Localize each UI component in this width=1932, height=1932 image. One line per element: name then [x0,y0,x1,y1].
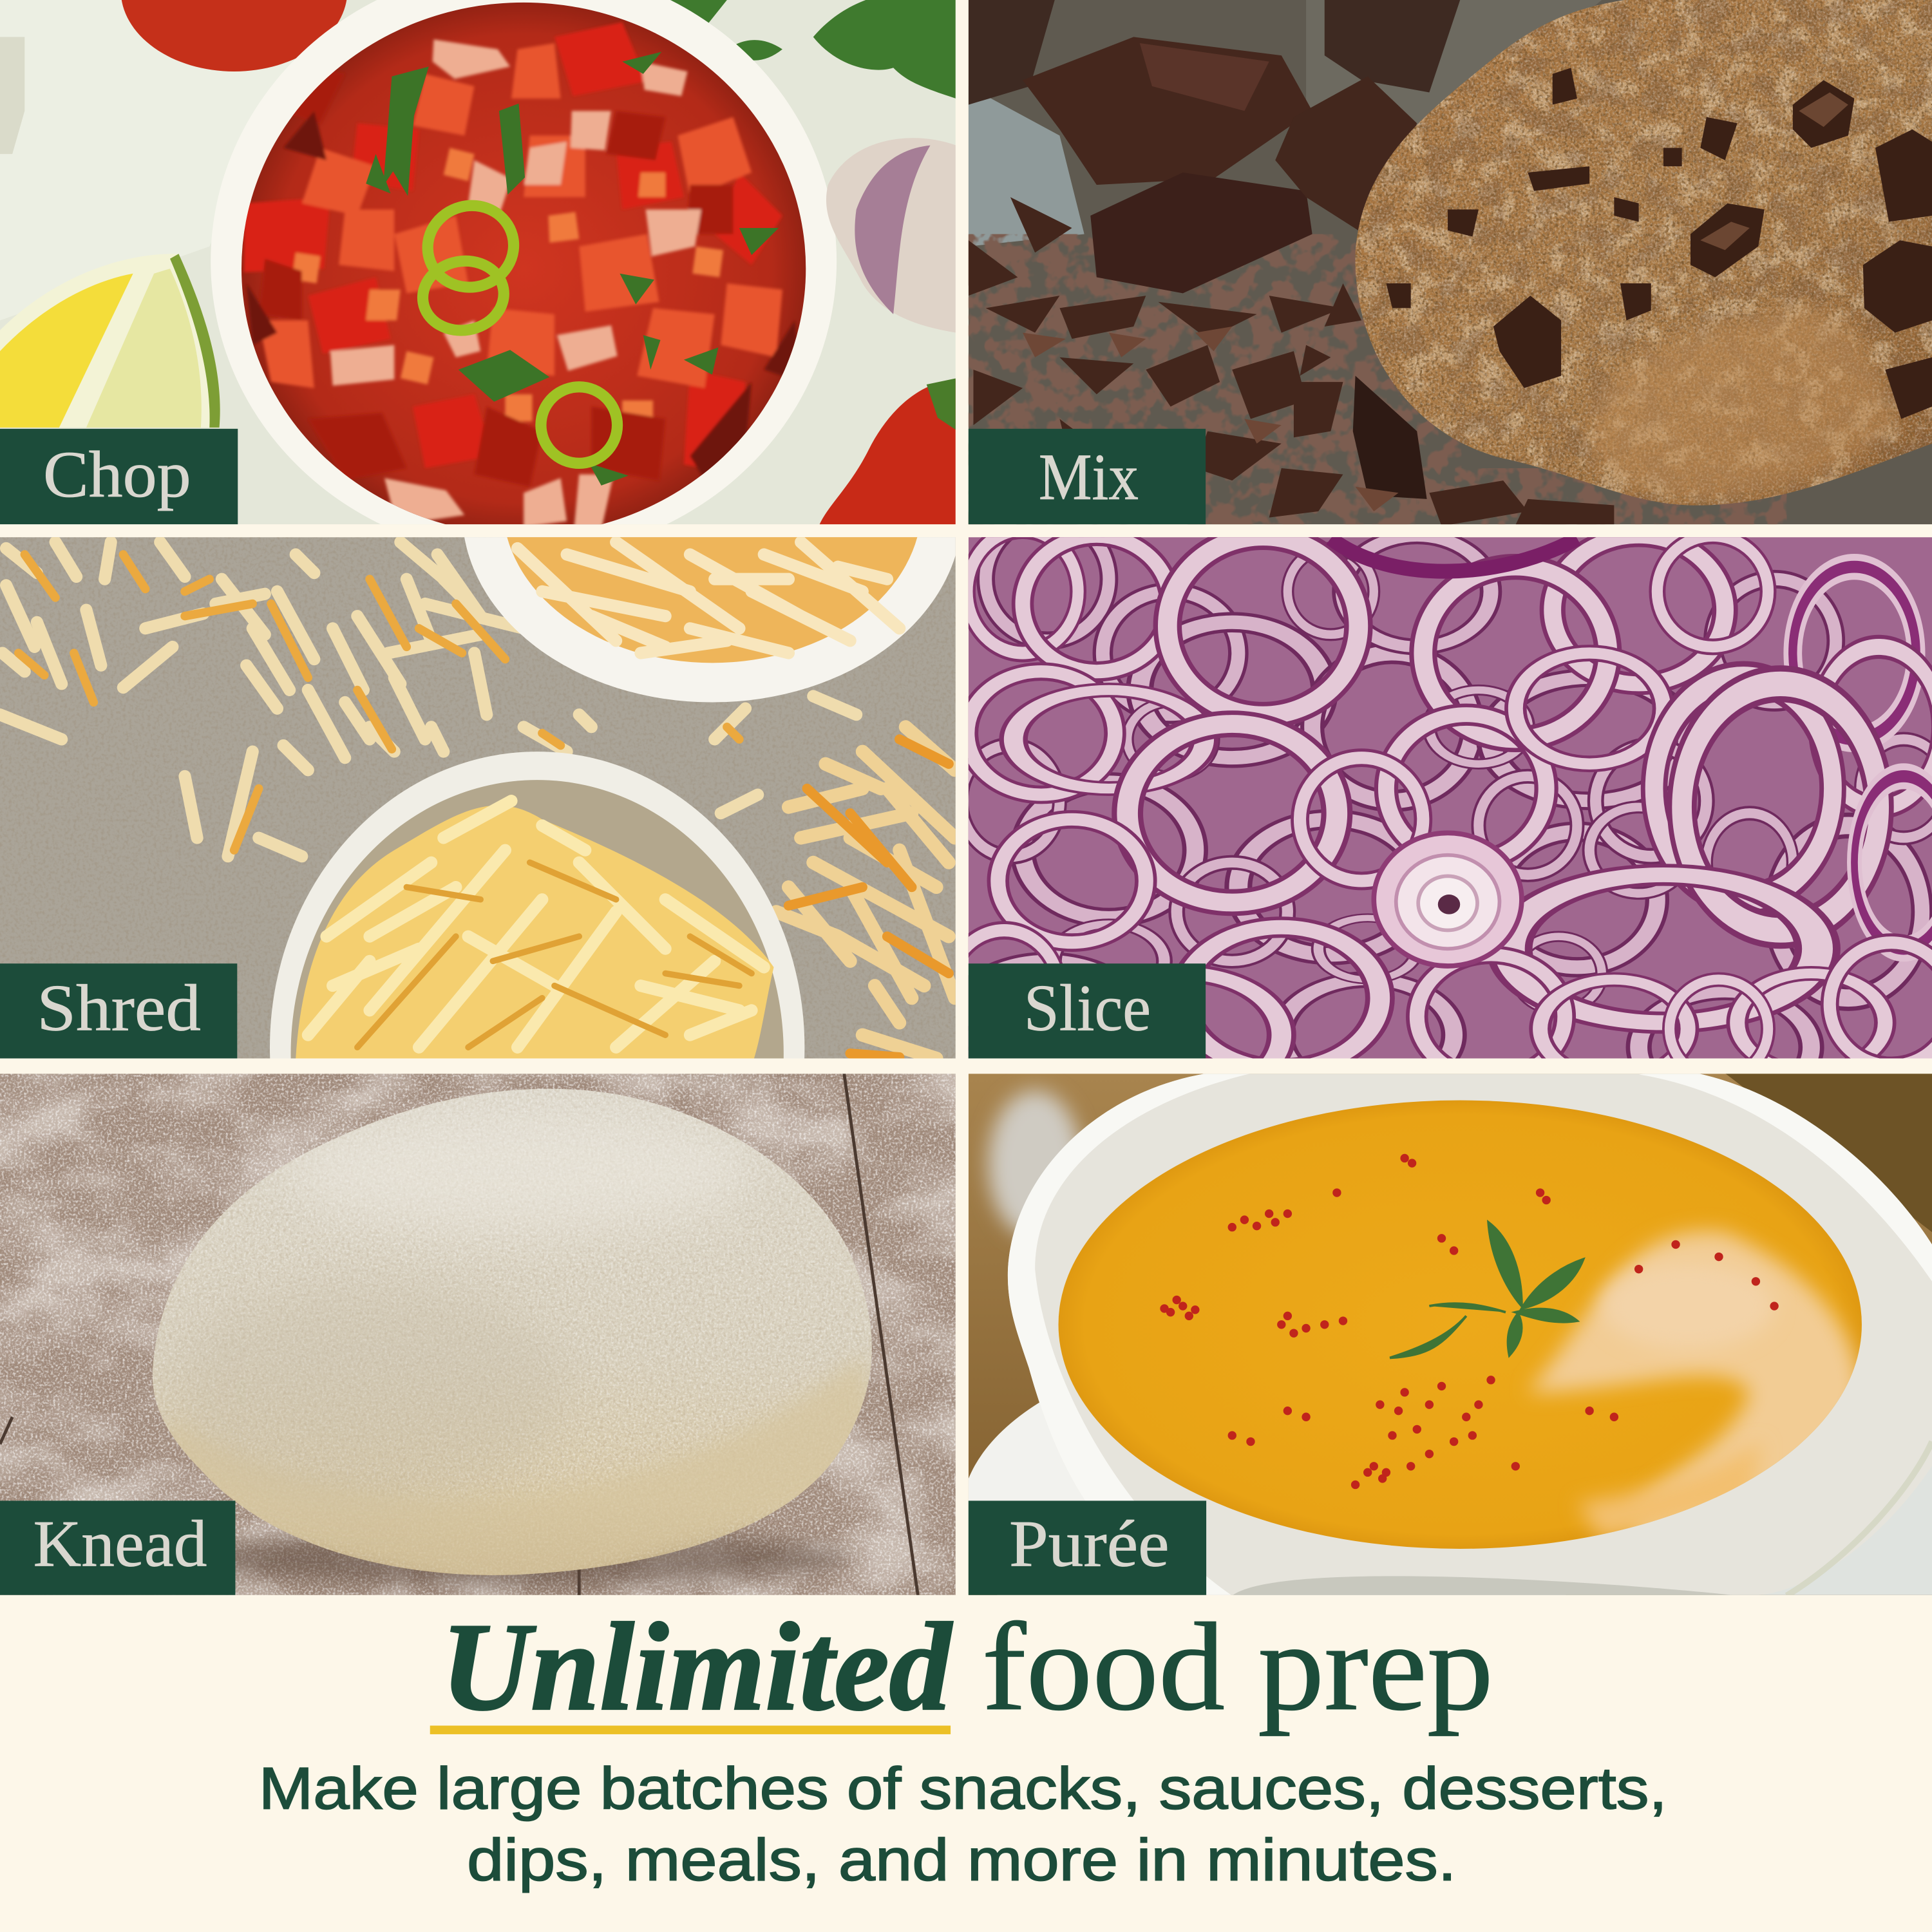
herbs [366,52,779,486]
title: food prep [982,1598,1493,1737]
background onion rings [955,518,1932,1103]
label: chop: Chop [43,438,191,511]
panel: chop [0,0,956,557]
chocolate chunks [969,0,1460,499]
soup surface [1058,1101,1862,1549]
label: puree [969,1501,1206,1595]
panel: slice [949,518,1932,1103]
icon: garlic [826,138,956,333]
icon: whole onion slice [1374,833,1522,966]
panel: puree [961,1070,1932,1688]
subtitle: Make large batches of snacks, sauces, desserts, [259,1756,1667,1822]
panel: knead [0,1073,956,1602]
icon: dough ball [148,1084,887,1602]
subtitle: dips, meals, and more in minutes. [467,1828,1456,1893]
title: Unlimited [441,1598,952,1737]
wood plank seams [0,1073,918,1596]
saucer [961,1343,1602,1688]
subtitle [259,1756,1667,1893]
salsa chunks [244,22,801,530]
scattered cheese shreds [0,542,857,857]
paprika specks [1164,1158,1774,1484]
label: knead [0,1501,235,1595]
title underline [430,1726,951,1734]
label: puree: Purée [1009,1508,1170,1581]
icon: soup bowl [1008,1070,1932,1596]
top dark onion arc [1331,538,1577,571]
label: shred [0,963,237,1058]
panel: shred [0,320,962,1343]
label: mix: Mix [1039,440,1139,514]
cheese heap right [776,727,955,1058]
onion rings [949,530,1932,1097]
title [441,1598,1493,1737]
icon: lower cheese bowl [270,752,804,1343]
icon: lime wedge [0,254,220,428]
panel: mix [969,0,1932,526]
chocolate chips [1386,68,1932,419]
label: slice: Slice [1024,971,1151,1045]
icon: red chili [819,379,956,525]
icon: cookie [1349,0,1932,525]
chocolate shavings texture [969,234,1461,525]
dark wood corner [1725,1073,1932,1232]
icon: rosemary herb [1390,1222,1584,1358]
label: chop [0,429,238,524]
pepper rings [417,196,623,469]
label: knead: Knead [33,1508,207,1581]
icon: parsley [665,0,956,99]
label: shred: Shred [37,971,201,1045]
label: mix [969,429,1206,524]
icon: upper cheese bowl [462,320,962,703]
icon: salsa bowl [211,0,837,557]
label: slice [969,963,1206,1058]
icon: tomato [121,0,348,71]
chocolate shavings [969,197,1614,526]
